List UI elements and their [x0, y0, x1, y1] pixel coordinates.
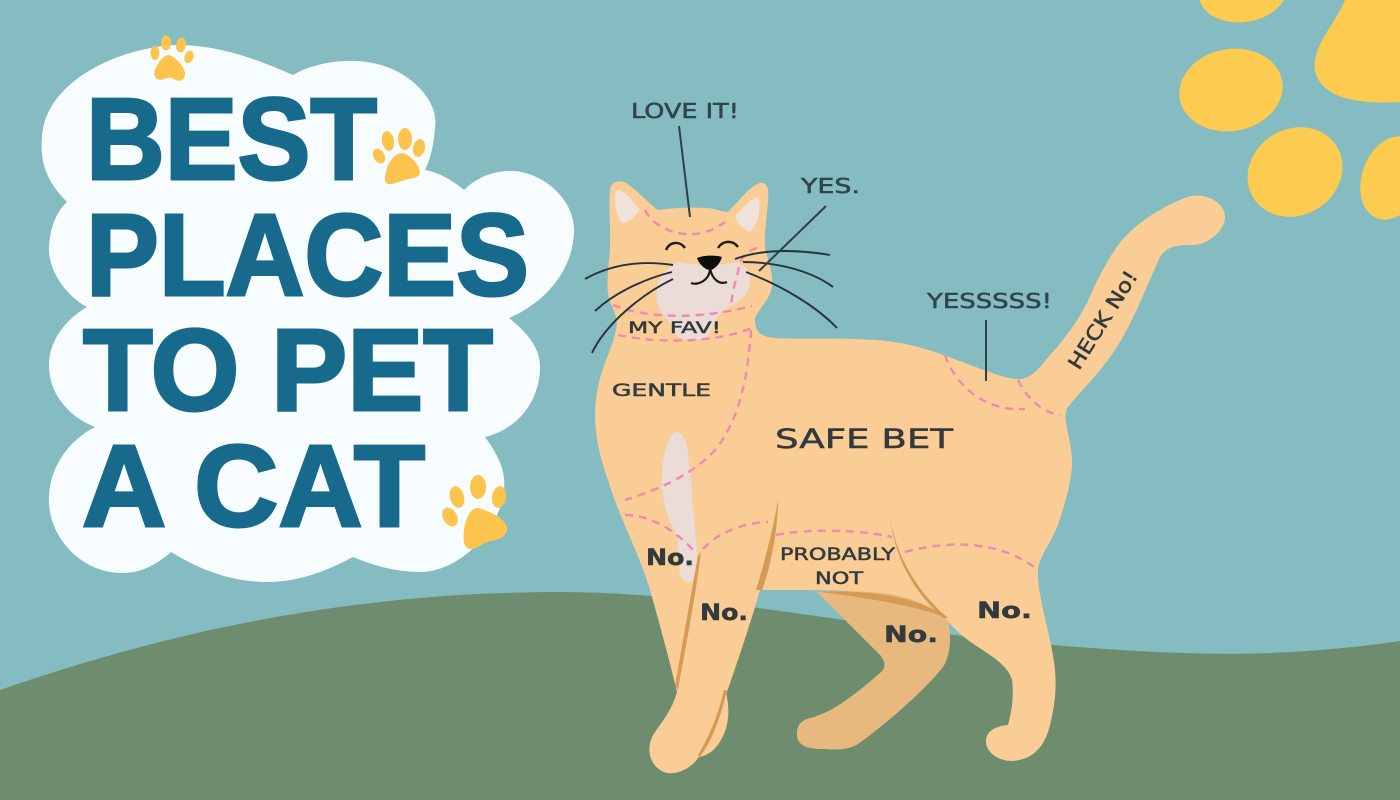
icon: paw top [150, 36, 195, 81]
pink dashed zones [613, 210, 1060, 570]
title: TO PET [83, 305, 493, 435]
labels on sky [631, 99, 1052, 313]
labels on cat: HECK No! [1063, 266, 1143, 374]
title: BEST [86, 74, 377, 204]
leg crease lines [675, 500, 948, 757]
icon: paw bottom [439, 475, 507, 549]
labels on cat [612, 266, 1143, 648]
labels on cat: PROBABLY [780, 545, 896, 565]
eyes [666, 242, 738, 250]
labels on cat: No. [646, 546, 694, 571]
cat body [595, 181, 1225, 773]
labels on cat: No. [700, 601, 748, 626]
labels on cat: No. [977, 599, 1032, 624]
labels on cat: NOT [815, 569, 864, 589]
labels on cat: GENTLE [612, 381, 711, 401]
ground hill [0, 592, 1400, 800]
cat [585, 181, 1225, 773]
title [82, 74, 529, 551]
icon: paw middle [370, 128, 427, 184]
belly patch [662, 432, 697, 582]
title: PLACES [86, 190, 529, 320]
labels on sky: YES. [800, 174, 860, 198]
labels on cat: SAFE BET [775, 424, 954, 455]
labels on sky: LOVE IT! [631, 99, 739, 123]
whiskers [585, 251, 837, 353]
inner ears [615, 190, 640, 223]
far hind leg [797, 590, 950, 749]
labels on cat: MY FAV! [628, 318, 721, 337]
far front paw [690, 680, 728, 758]
title: A CAT [82, 421, 425, 551]
title cloud [42, 45, 574, 582]
nose and mouth [691, 256, 727, 284]
muzzle and chest patch [656, 262, 750, 339]
icon: large yellow paw [1173, 0, 1400, 234]
labels on sky: YESSSSS! [926, 289, 1052, 313]
labels on cat: No. [884, 623, 938, 648]
pointer lines [679, 126, 986, 381]
